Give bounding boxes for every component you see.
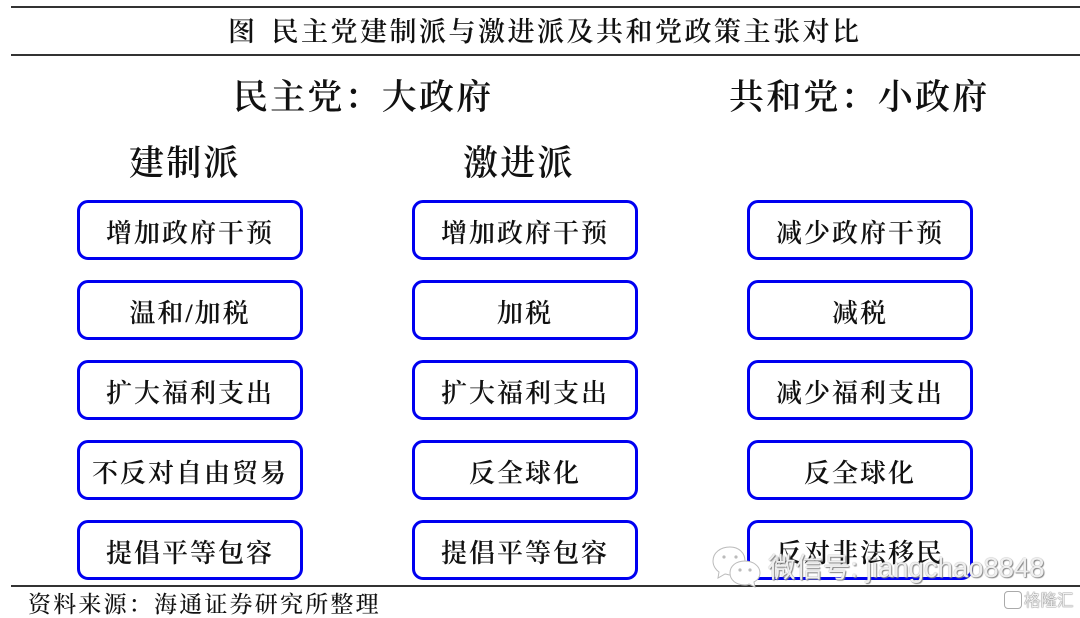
box: not opposed to free trade <box>77 440 303 500</box>
box: increase government intervention <box>77 200 303 260</box>
box: equality and inclusion <box>77 520 303 580</box>
watermark: Gelonghui logo: 格隆汇 <box>1024 592 1074 610</box>
box: anti-globalization: 反全球化 <box>469 459 581 488</box>
source note: 资料来源：海通证券研究所整理 <box>28 592 381 617</box>
heading: Republicans small government: 共和党：小政府 <box>729 78 989 117</box>
box: anti-globalization: 反全球化 <box>804 459 916 488</box>
box: expand welfare spending <box>412 360 638 420</box>
box: cut taxes: 减税 <box>832 299 888 328</box>
heading: Democrats big government: 民主党：大政府 <box>233 78 493 117</box>
box: reduce government intervention <box>747 200 973 260</box>
box: reduce welfare spending: 减少福利支出 <box>776 379 944 408</box>
box: reduce government intervention: 减少政府干预 <box>776 219 944 248</box>
box: increase government intervention: 增加政府干预 <box>441 219 609 248</box>
heading: establishment: 建制派 <box>129 144 241 183</box>
heading: progressives: 激进派 <box>463 144 575 183</box>
box: moderate tax increase: 温和/加税 <box>129 299 251 328</box>
box: oppose illegal immigration: 反对非法移民 <box>776 539 944 568</box>
box: equality and inclusion: 提倡平等包容 <box>441 539 609 568</box>
box: expand welfare spending <box>77 360 303 420</box>
box: reduce welfare spending <box>747 360 973 420</box>
column: establishment boxes <box>77 200 303 580</box>
title: 图 民主党建制派与激进派及共和党政策主张对比 <box>228 17 862 47</box>
box: equality and inclusion <box>412 520 638 580</box>
box: anti-globalization <box>747 440 973 500</box>
watermark: Gelonghui logo <box>1004 591 1074 610</box>
box: raise taxes <box>412 280 638 340</box>
box: expand welfare spending: 扩大福利支出 <box>106 379 274 408</box>
box: increase government intervention: 增加政府干预 <box>106 219 274 248</box>
box: equality and inclusion: 提倡平等包容 <box>106 539 274 568</box>
box: cut taxes <box>747 280 973 340</box>
box: anti-globalization <box>412 440 638 500</box>
box: expand welfare spending: 扩大福利支出 <box>441 379 609 408</box>
watermark text: 微信号: jiangchao8848 <box>768 552 1045 583</box>
icon: WeChat watermark <box>712 546 760 588</box>
column: progressive boxes <box>412 200 638 580</box>
box: oppose illegal immigration <box>747 520 973 580</box>
box: raise taxes: 加税 <box>497 299 553 328</box>
box: moderate tax increase <box>77 280 303 340</box>
box: increase government intervention <box>412 200 638 260</box>
column: Republican boxes <box>747 200 973 580</box>
box: not opposed to free trade: 不反对自由贸易 <box>92 459 288 488</box>
